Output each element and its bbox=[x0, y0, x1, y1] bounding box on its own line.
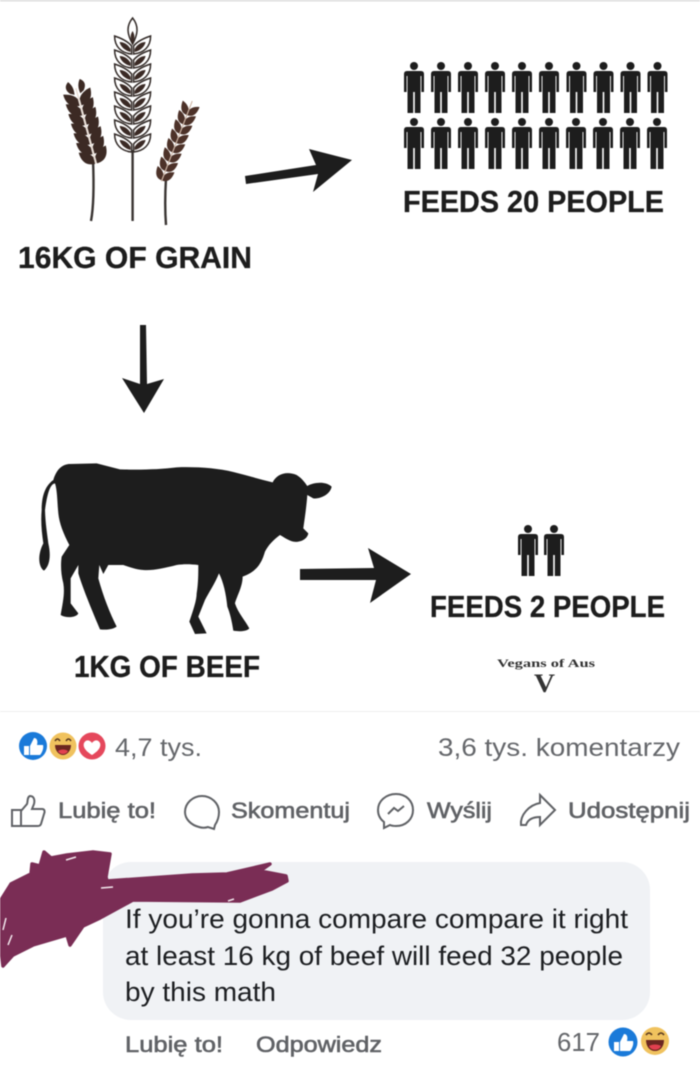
logo: Vegans of Aus: Vegans of Aus bbox=[497, 656, 595, 670]
icon: cow silhouette bbox=[39, 463, 332, 634]
comment text bbox=[125, 904, 629, 1007]
redaction scribble bbox=[1, 852, 287, 966]
reaction icons bbox=[19, 732, 106, 760]
icon: speech bubble bbox=[185, 796, 219, 829]
comment bubble bbox=[103, 862, 650, 1020]
comment count: 3,6 tys. komentarzy bbox=[438, 734, 681, 762]
comment action: reply: Odpowiedz bbox=[256, 1032, 382, 1057]
icon: two people bbox=[518, 525, 564, 576]
icon: messenger bbox=[378, 794, 413, 828]
logo: Vegans of Aus bbox=[497, 656, 595, 698]
icon: love and haha reactions bbox=[50, 732, 106, 760]
icon: three wheat stalks bbox=[60, 18, 201, 225]
reaction count: 4,7 tys. bbox=[115, 734, 202, 762]
action: send: Wyślij bbox=[427, 798, 492, 823]
comment reaction count: 617 bbox=[557, 1027, 600, 1057]
icon: grid of twenty people bbox=[404, 62, 668, 169]
icon: like reaction bbox=[19, 732, 47, 760]
arrow: beef to 2 people bbox=[300, 548, 411, 603]
heading: 1kg of beef: 1KG OF BEEF bbox=[74, 649, 260, 684]
heading: 16kg of grain: 16KG OF GRAIN bbox=[18, 240, 252, 275]
icon: right wheat stalk bbox=[153, 98, 201, 225]
heading: feeds 20 people: FEEDS 20 PEOPLE bbox=[403, 184, 664, 219]
action: share bbox=[521, 795, 690, 825]
icon: centre wheat stalk bbox=[115, 18, 151, 221]
logo: Vegans of Aus: V bbox=[534, 669, 555, 698]
comment reaction icons bbox=[608, 1027, 669, 1056]
comment text: at least 16 kg of beef will feed 32 people bbox=[125, 941, 623, 971]
comment action: like: Lubię to! bbox=[125, 1032, 223, 1057]
action: like: Lubię to! bbox=[58, 798, 156, 823]
action: send bbox=[378, 794, 492, 828]
heading: feeds 2 people: FEEDS 2 PEOPLE bbox=[430, 589, 665, 624]
arrow: grain to 20 people bbox=[245, 149, 352, 192]
icon: share arrow bbox=[521, 795, 555, 825]
action: comment bbox=[185, 796, 350, 829]
action: like bbox=[12, 796, 156, 826]
icon: left wheat stalk bbox=[60, 77, 110, 221]
action: comment: Skomentuj bbox=[231, 798, 350, 823]
arrow: grain down to beef bbox=[122, 325, 164, 413]
comment text: If you’re gonna compare compare it right bbox=[125, 904, 629, 934]
action: share: Udostępnij bbox=[568, 798, 690, 823]
comment text: by this math bbox=[125, 977, 276, 1007]
icon: thumb up bbox=[12, 796, 45, 826]
